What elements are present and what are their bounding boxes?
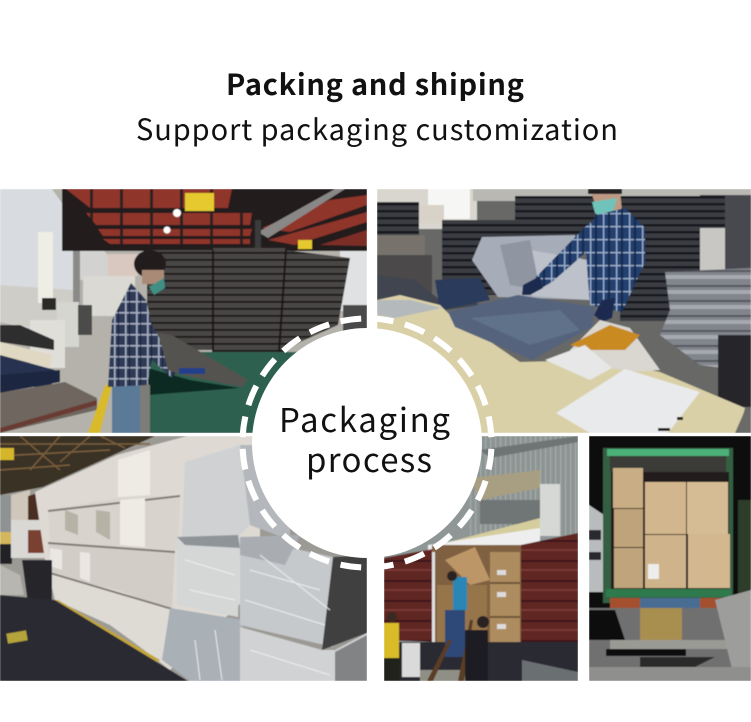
photo: worker wrapping cushion on table [377,189,751,433]
photo: worker stacking cushions in factory [0,189,367,433]
photo: wall of wrapped cushion bales [0,436,367,681]
dashed white ring [242,318,492,568]
photo: loaded shipping container on truck [589,436,751,681]
photo: loading boxes into truck [384,436,578,681]
central badge: packaging process: process [306,434,432,482]
central badge: packaging process: Packaging [279,394,450,442]
white gutters between photos [0,189,751,681]
central badge: packaging process [252,328,482,558]
title: Packing and shiping [226,62,524,104]
subtitle: Support packaging customization [136,107,618,149]
